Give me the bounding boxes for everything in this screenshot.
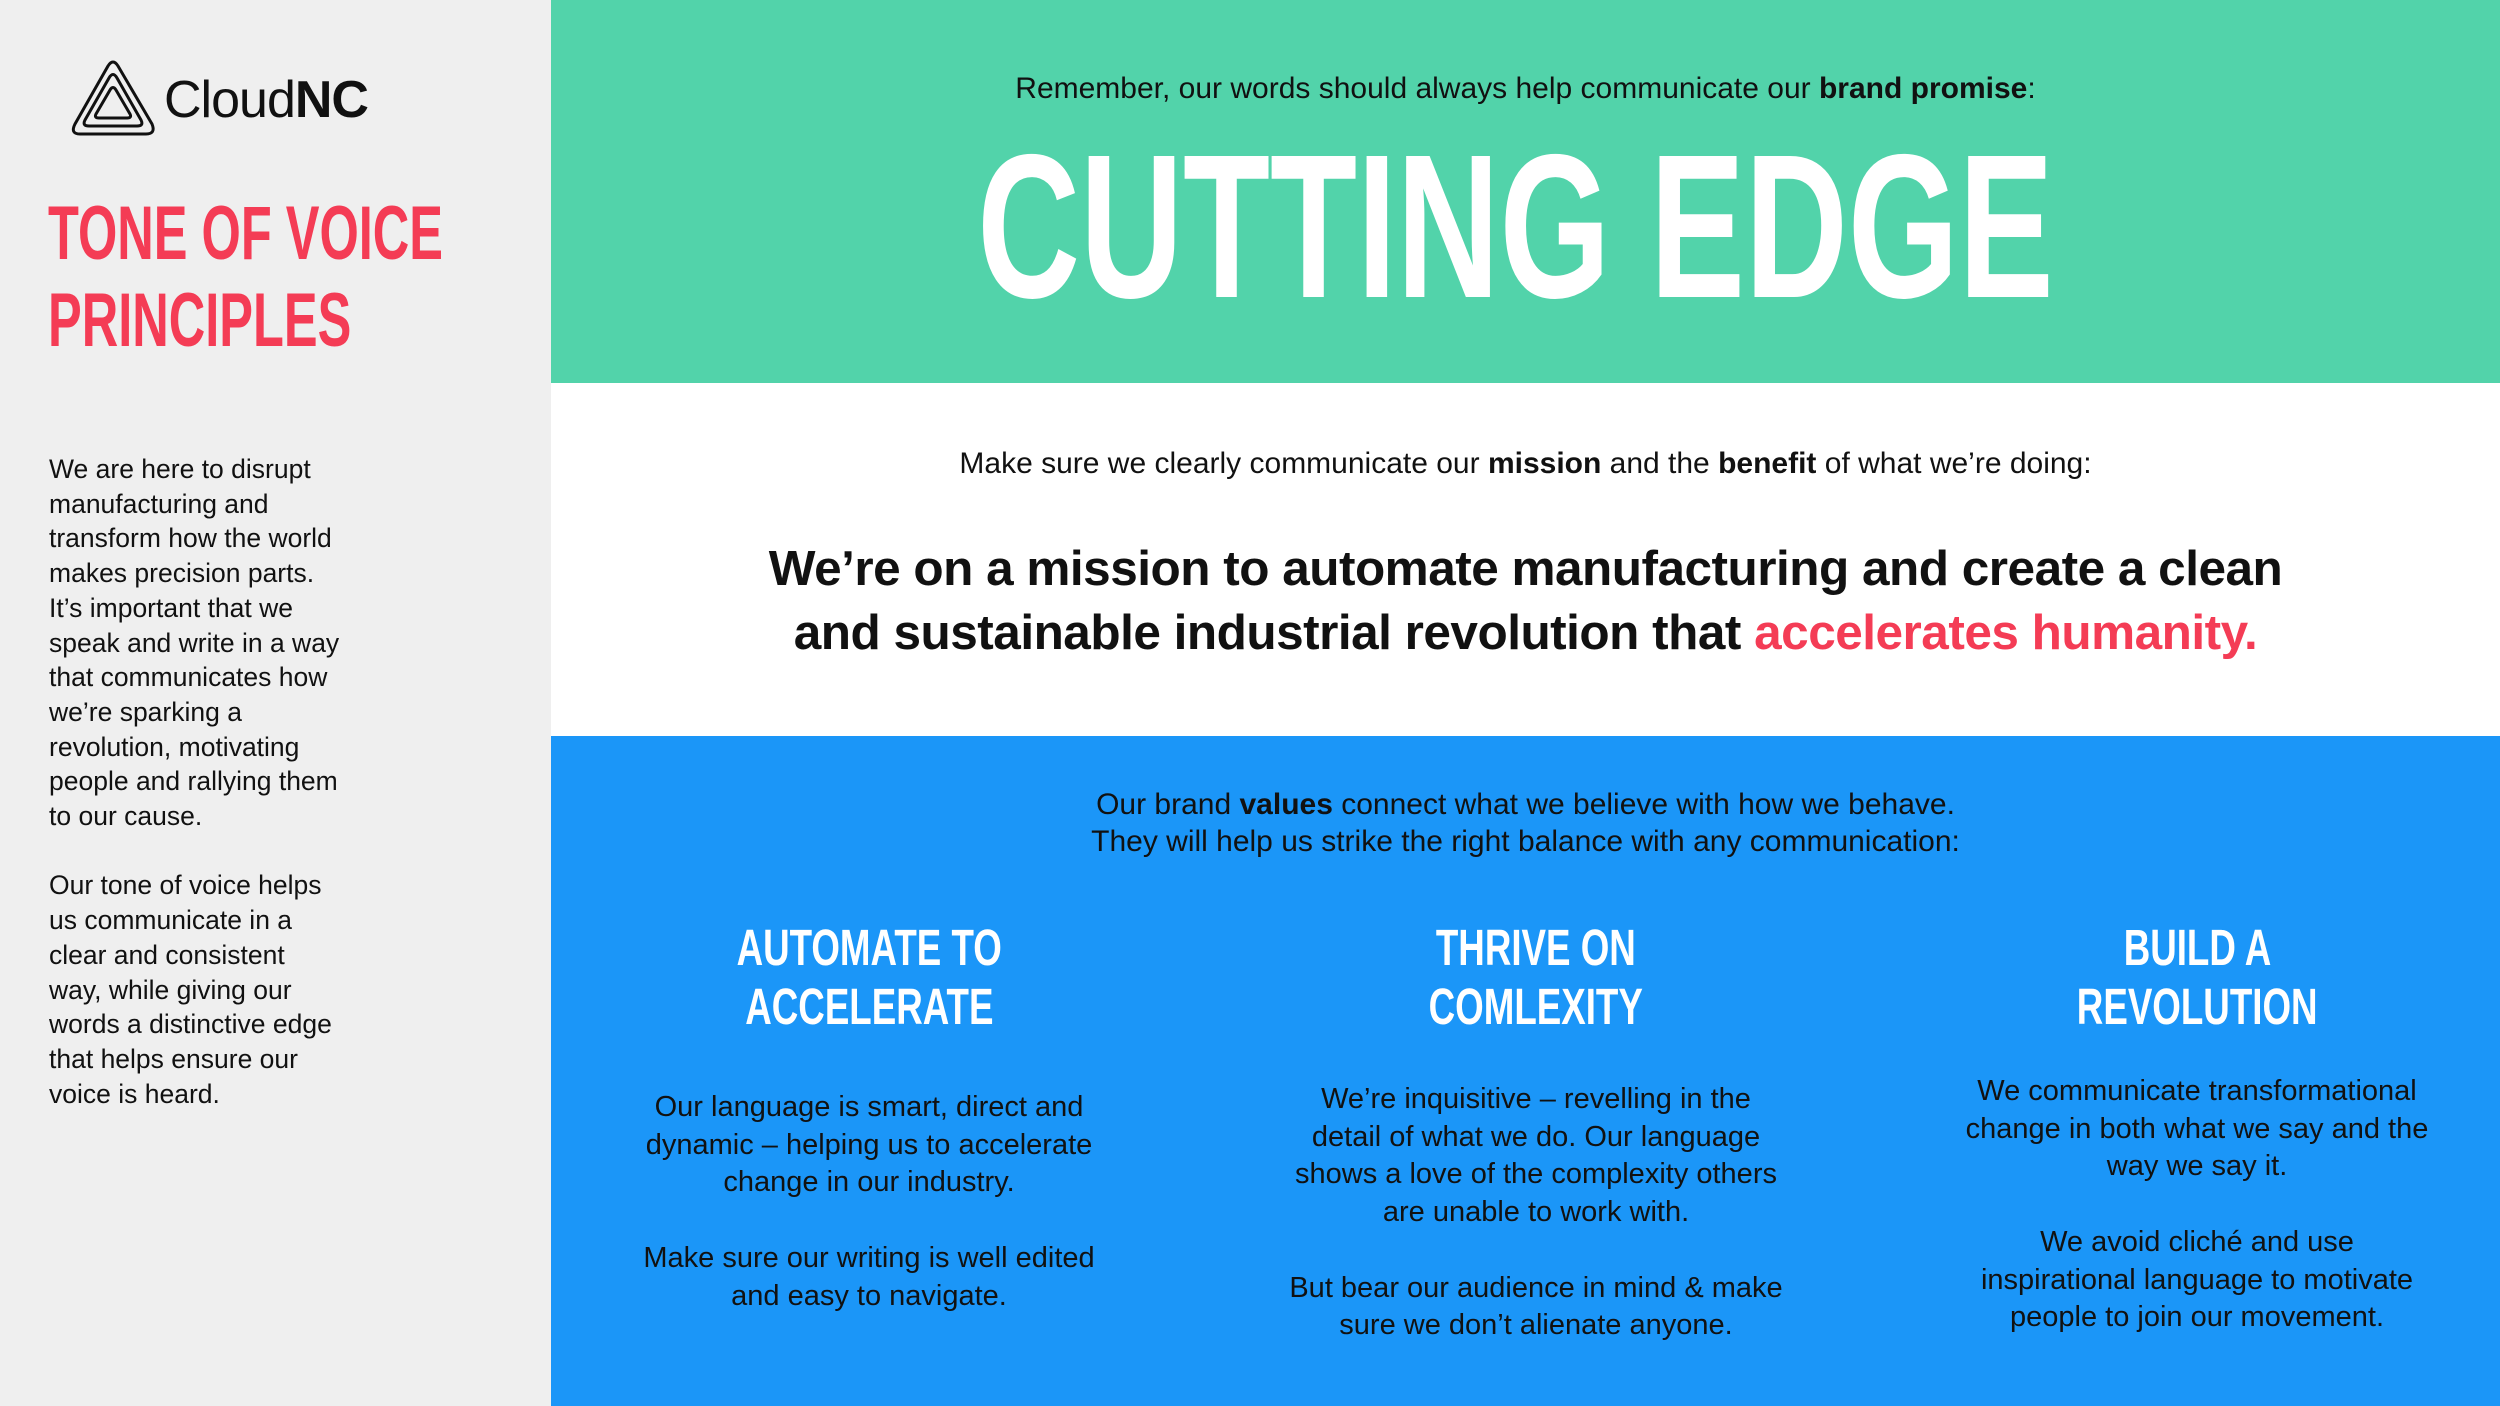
- text block: intro: words a distinctive edge: [49, 1009, 332, 1039]
- heading: REVOLUTION: [2077, 978, 2317, 1035]
- body: way we say it.: [2107, 1150, 2287, 1182]
- text block: intro: people and rallying them: [49, 766, 338, 796]
- column: automate to accelerate: [643, 919, 1095, 1312]
- body: [1966, 1075, 2428, 1333]
- body: people to join our movement.: [2010, 1301, 2384, 1333]
- text block: intro: We are here to disrupt: [49, 454, 311, 484]
- heading: [1429, 919, 1643, 1035]
- text: mission statement: [768, 541, 2282, 660]
- heading: COMLEXITY: [1429, 978, 1643, 1035]
- body: change in our industry.: [723, 1166, 1015, 1198]
- heading: cutting edge: CUTTING EDGE: [977, 112, 2054, 341]
- logo: CloudNC: [72, 60, 368, 136]
- body: [643, 1091, 1095, 1312]
- text block: intro: we’re sparking a: [49, 697, 242, 727]
- column: thrive on complexity: [1289, 919, 1783, 1341]
- text: values intro: They will help us strike the right balance with any communication:: [1091, 825, 1960, 858]
- text block: intro: that helps ensure our: [49, 1044, 298, 1074]
- body: We communicate transformational: [1977, 1075, 2417, 1107]
- heading: BUILD A: [2123, 919, 2271, 976]
- column: build a revolution: [1966, 919, 2428, 1333]
- text block: intro: transform how the world: [49, 523, 332, 553]
- text block: intro: that communicates how: [49, 662, 327, 692]
- body: and easy to navigate.: [731, 1280, 1007, 1312]
- body: But bear our audience in mind & make: [1289, 1272, 1783, 1304]
- panel: mission (white): [551, 383, 2500, 736]
- body: [1289, 1083, 1783, 1341]
- body: inspirational language to motivate: [1981, 1264, 2413, 1296]
- body: We avoid cliché and use: [2040, 1226, 2354, 1258]
- body: We’re inquisitive – revelling in the: [1321, 1083, 1751, 1115]
- text block: intro: clear and consistent: [49, 940, 285, 970]
- panel: brand values (blue): [551, 736, 2500, 1406]
- text: mission statement: and sustainable industrial revolution that accelerates humanity.: [794, 605, 2257, 660]
- text block: intro: revolution, motivating: [49, 732, 299, 762]
- text block: intro: to our cause.: [49, 801, 202, 831]
- heading: [736, 919, 1002, 1035]
- text block: intro: Our tone of voice helps: [49, 870, 322, 900]
- text block: intro: [49, 454, 339, 1109]
- logo: CloudNC: CloudNC: [164, 71, 368, 129]
- body: shows a love of the complexity others: [1295, 1158, 1777, 1190]
- body: dynamic – helping us to accelerate: [646, 1129, 1092, 1161]
- body: Our language is smart, direct and: [655, 1091, 1083, 1123]
- title: tone of voice principles: PRINCIPLES: [48, 278, 351, 363]
- text block: intro: us communicate in a: [49, 905, 292, 935]
- body: are unable to work with.: [1383, 1196, 1689, 1228]
- heading: [2077, 919, 2317, 1035]
- heading: THRIVE ON: [1436, 919, 1636, 976]
- body: change in both what we say and the: [1966, 1113, 2428, 1145]
- text block: intro: way, while giving our: [49, 975, 292, 1005]
- text block: intro: makes precision parts.: [49, 558, 314, 588]
- body: Make sure our writing is well edited: [643, 1242, 1095, 1274]
- text: values intro: [1091, 788, 1960, 858]
- heading: AUTOMATE TO: [736, 919, 1002, 976]
- title: tone of voice principles: TONE OF VOICE: [48, 191, 443, 276]
- panel: left sidebar: [0, 0, 551, 1406]
- text: values intro: Our brand values connect what we believe with how we behave.: [1096, 788, 1955, 821]
- text block: intro: manufacturing and: [49, 489, 269, 519]
- panel: brand promise (green): [551, 0, 2500, 383]
- text: mission statement: We’re on a mission to automate manufacturing and create a clean: [769, 541, 2282, 596]
- text: mission intro: Make sure we clearly communicate our mission and the benefit of what we’re doing:: [959, 447, 2092, 480]
- text block: intro: voice is heard.: [49, 1079, 220, 1109]
- text: brand promise intro: Remember, our words should always help communicate our brand promise:: [1015, 72, 2036, 105]
- body: detail of what we do. Our language: [1312, 1121, 1760, 1153]
- body: sure we don’t alienate anyone.: [1339, 1309, 1733, 1341]
- text block: intro: It’s important that we: [49, 593, 293, 623]
- text block: intro: speak and write in a way: [49, 628, 339, 658]
- title: tone of voice principles: [48, 191, 443, 363]
- heading: ACCELERATE: [745, 978, 993, 1035]
